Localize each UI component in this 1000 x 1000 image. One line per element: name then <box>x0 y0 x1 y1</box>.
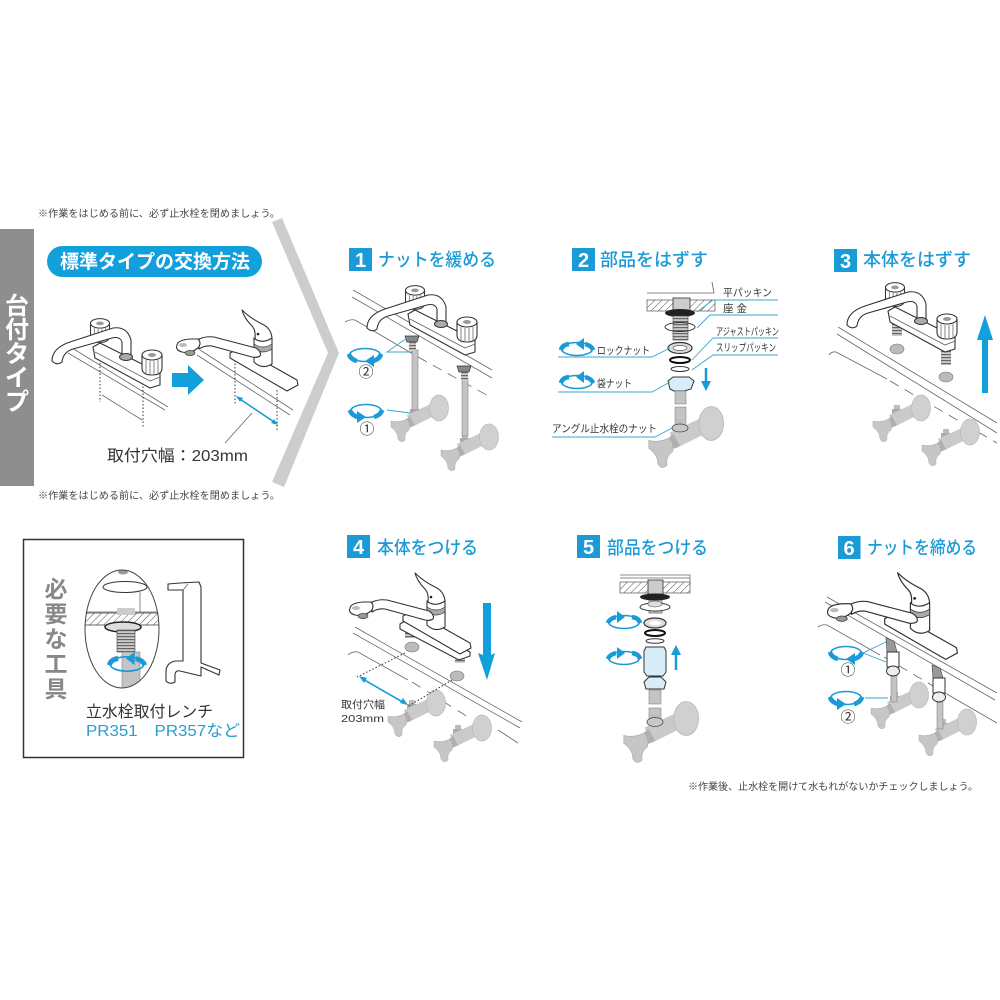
labels: step 2 parts: ロックナット <box>597 345 650 357</box>
heading: step 5: 5 <box>583 537 594 559</box>
illustration: step 1 <box>345 286 498 471</box>
illustration: old two-handle faucet <box>52 319 168 428</box>
heading: step 1 <box>349 248 496 272</box>
labels: step 2 parts: 平パッキン <box>723 287 772 299</box>
illustration: step 6 <box>818 573 997 756</box>
heading: step 1: ナットを緩める <box>378 250 496 270</box>
heading: step 3: 本体をはずす <box>863 250 971 270</box>
label: wrench models: PR351 PR357など <box>86 722 240 740</box>
heading: step 3 <box>834 249 971 273</box>
label: step 4 hole width: 取付穴幅 <box>341 698 385 711</box>
labels: step 2 parts: 座金 <box>723 302 748 315</box>
chevron divider <box>272 218 339 487</box>
label: mounting hole width: 取付穴幅：203mm <box>107 447 248 465</box>
labels: step 2 parts: スリップパッキン <box>716 342 776 354</box>
label: wrench name: 立水栓取付レンチ <box>86 703 213 721</box>
note: bottom of left panel: ※作業をはじめる前に、必ず止水栓を閉めましょう。 <box>38 489 280 502</box>
heading: step 4 <box>347 535 478 559</box>
heading: step 5 <box>577 535 708 559</box>
arrow: replace <box>172 365 204 395</box>
icon: socket wrench <box>166 582 220 683</box>
panel: category bar: 台付タイプ <box>5 293 29 416</box>
heading: step 6 <box>838 536 977 560</box>
label: step 4 hole width <box>341 698 385 725</box>
heading: step 4: 本体をつける <box>377 538 478 558</box>
illustration: step 1: ② <box>358 364 374 381</box>
heading pill: standard type <box>47 246 262 277</box>
heading: step 3: 3 <box>840 251 851 273</box>
illustration: step 1: ① <box>359 421 375 438</box>
note: after work check: ※作業後、止水栓を開けて水もれがないかチェックしましょう。 <box>688 780 978 793</box>
label: step 4 hole width: 203mm <box>341 713 384 725</box>
heading: step 1: 1 <box>355 250 366 272</box>
illustration: step 6: ② <box>840 709 856 726</box>
note: top: ※作業をはじめる前に、必ず止水栓を閉めましょう。 <box>38 207 280 220</box>
heading: step 4: 4 <box>353 537 365 559</box>
panel: required tools <box>24 540 244 758</box>
illustration: step 5 <box>608 575 699 762</box>
illustration: step 4 <box>348 573 522 762</box>
illustration: step 3 <box>829 283 997 466</box>
heading: step 6: 6 <box>843 538 855 560</box>
heading: step 5: 部品をつける <box>607 538 708 558</box>
labels: step 2 parts: アジャストパッキン <box>716 326 779 338</box>
heading: step 2: 部品をはずす <box>600 250 708 270</box>
heading: step 6: ナットを締める <box>867 538 977 558</box>
labels: step 2 parts: 袋ナット <box>597 377 632 390</box>
illustration: step 2 exploded parts <box>552 282 778 467</box>
detail oval: wrench use <box>84 570 160 692</box>
panel: category bar <box>0 229 34 486</box>
labels: step 2 parts <box>552 287 779 435</box>
heading: required tools: 必要な工具 <box>44 576 68 702</box>
labels: step 2 parts: アングル止水栓のナット <box>552 422 657 435</box>
heading: step 2 <box>572 248 708 272</box>
illustration: new single-lever faucet <box>177 310 298 443</box>
heading: step 2: 2 <box>578 250 589 272</box>
heading pill: standard type: 標準タイプの交換方法 <box>60 250 250 273</box>
illustration: step 6: ① <box>840 662 856 679</box>
